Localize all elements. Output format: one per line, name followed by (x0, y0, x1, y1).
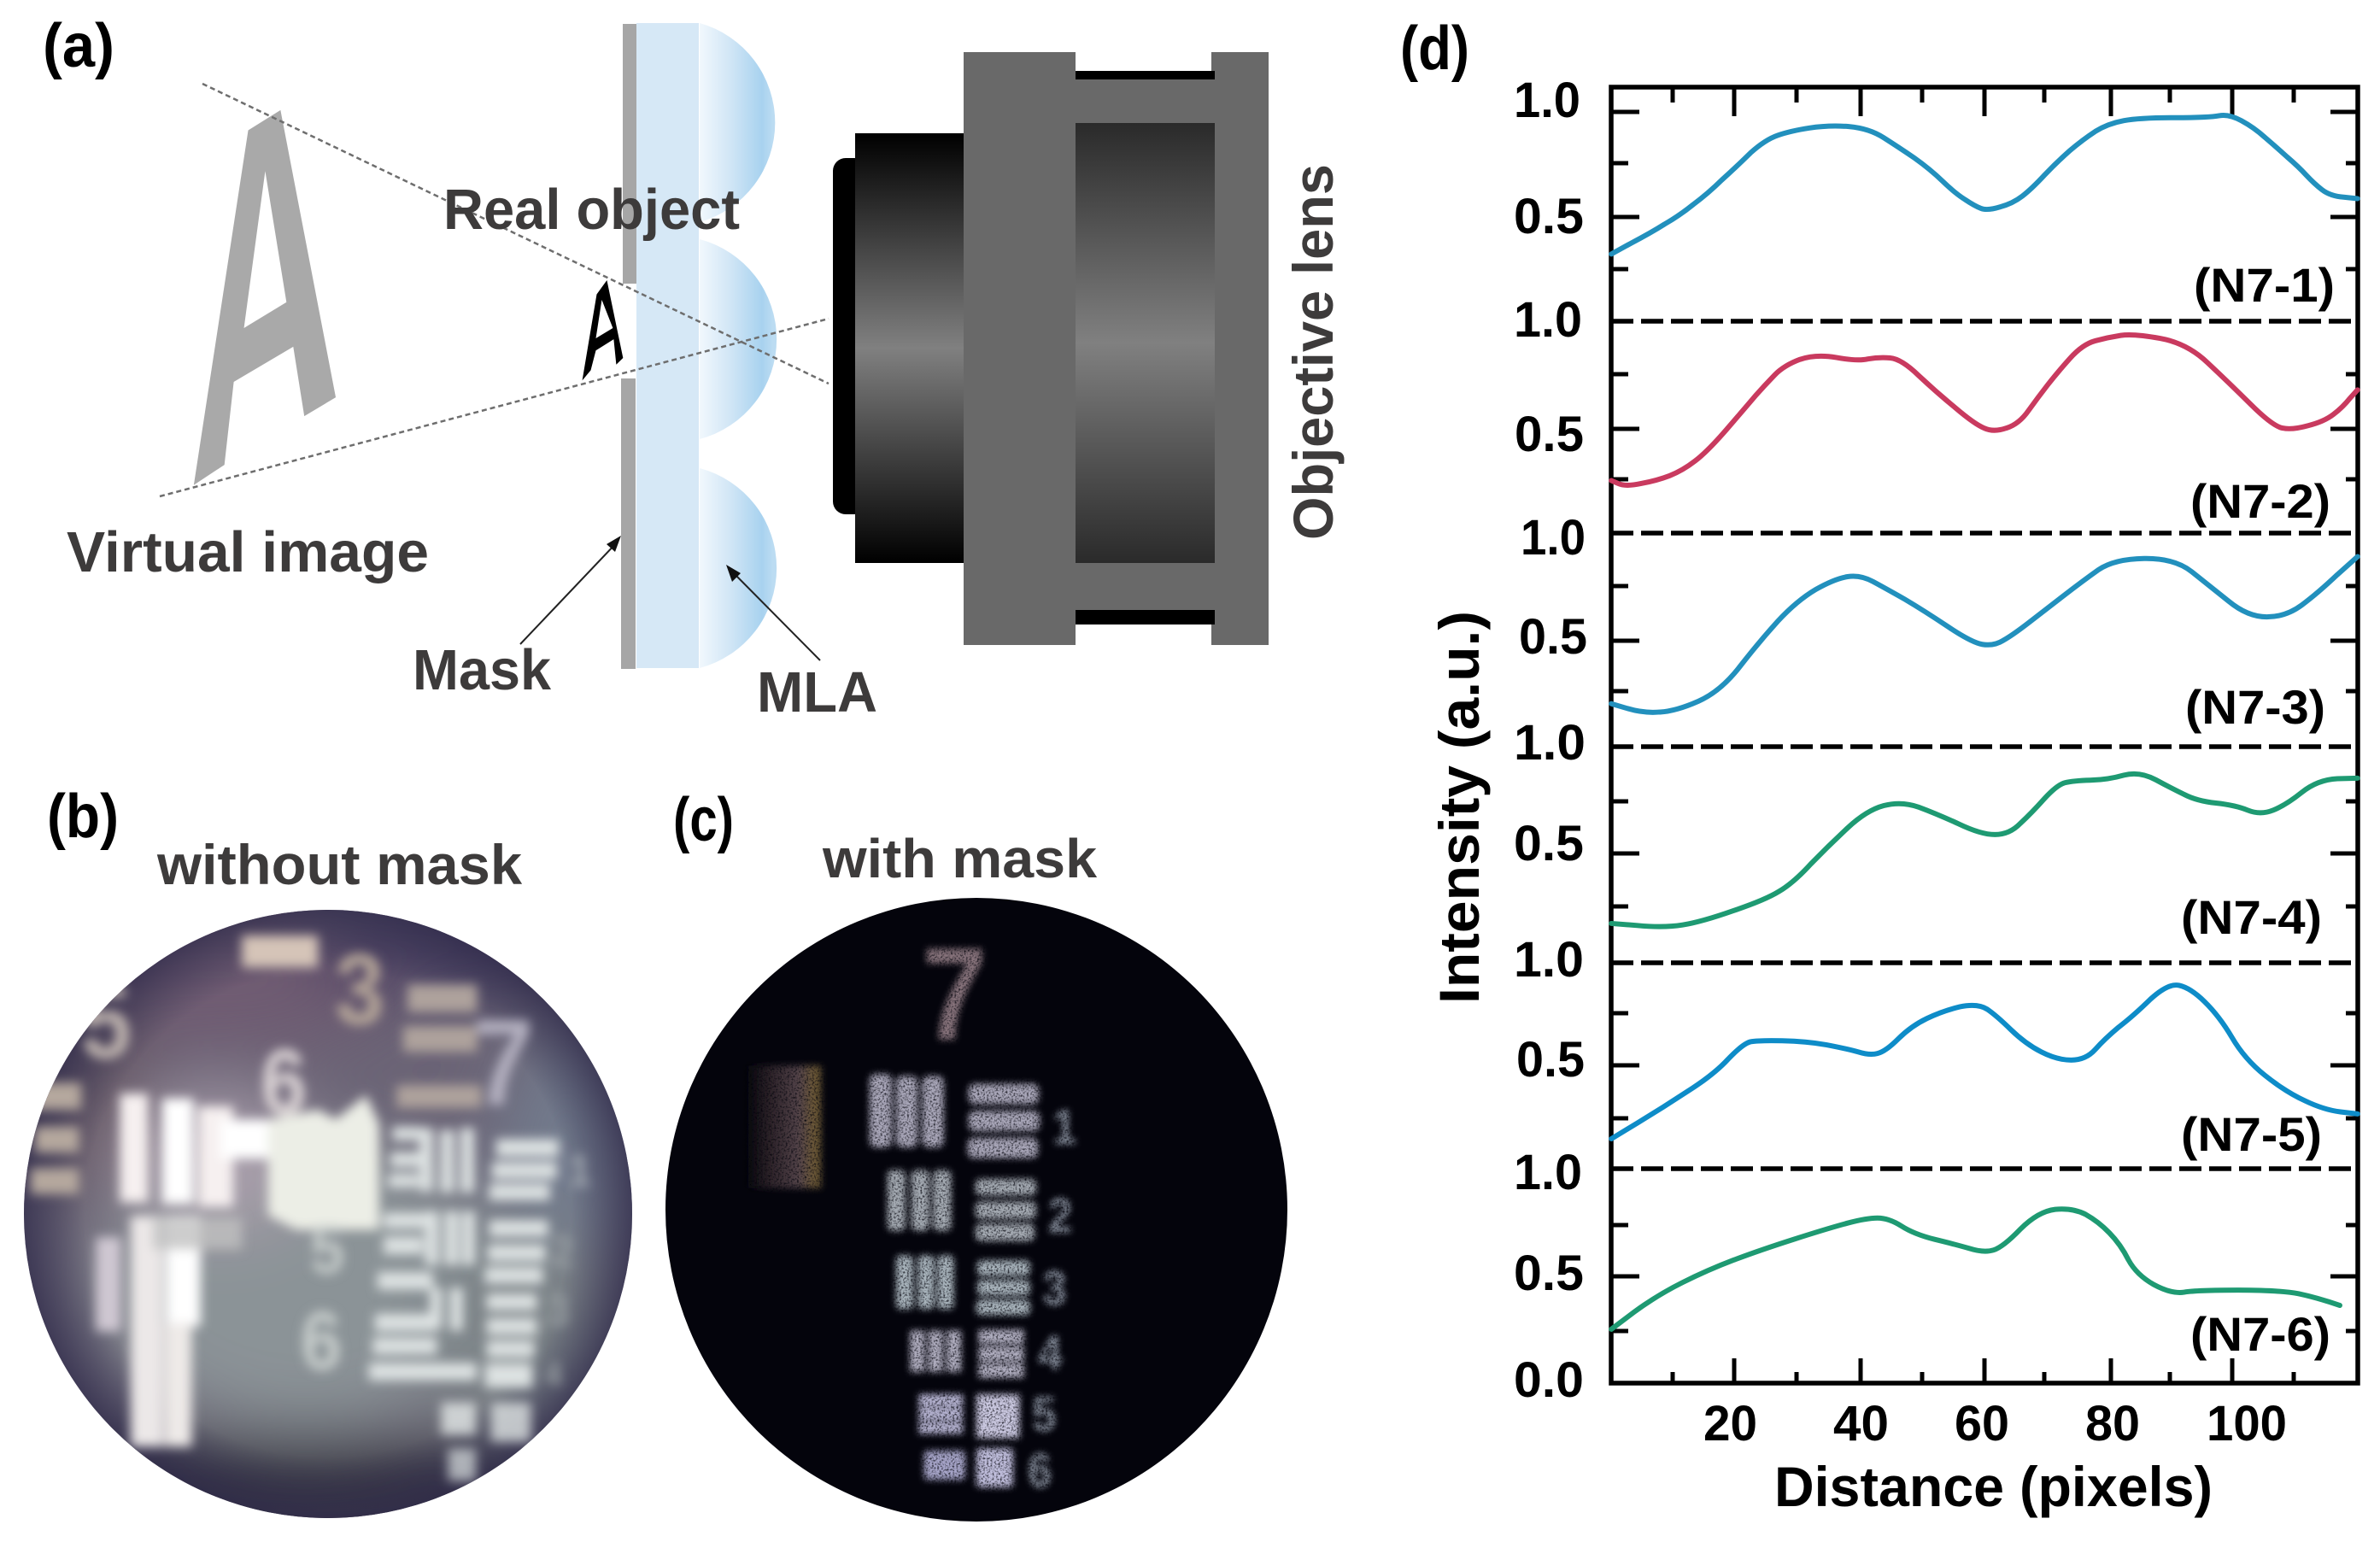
target row numbers: 4 (1038, 1325, 1062, 1381)
mask with aperture (621, 24, 636, 669)
series label N7-3: (N7-3) (2185, 680, 2325, 734)
target row numbers: 1 (1052, 1099, 1076, 1155)
micrograph b (17, 901, 641, 1544)
y axis title: Intensity (a.u.) (1427, 611, 1491, 1004)
label: real object: Real object (443, 178, 740, 242)
y tick labels: 0.5 (1516, 1032, 1585, 1088)
y tick labels (1514, 73, 1587, 1408)
group 5 bars (918, 1394, 1020, 1439)
virtual image letter A (194, 110, 336, 485)
y tick labels: 1.0 (1514, 1145, 1582, 1200)
y tick labels: 1.0 (1514, 715, 1586, 771)
x tick labels: 100 (2207, 1396, 2287, 1451)
panel label c: (c) (673, 786, 734, 854)
x tick labels: 80 (2085, 1396, 2140, 1451)
faded target digits: 2 (551, 1228, 573, 1276)
group 2 bars (888, 1170, 1036, 1241)
curve N7-1 (1611, 115, 2358, 254)
curve N7-4 (1611, 774, 2358, 927)
y tick labels: 0.0 (1514, 1352, 1584, 1408)
panel b: image without mask (17, 783, 641, 1544)
lower left bars (96, 1237, 121, 1331)
panel label b: (b) (47, 783, 119, 851)
series label N7-6: (N7-6) (2190, 1307, 2330, 1361)
x tick labels: 20 (1703, 1396, 1757, 1451)
dim block (747, 1065, 822, 1188)
panel a: optical schematic (43, 12, 1345, 724)
axis ticks (1611, 87, 2358, 1383)
caption: with mask: with mask (822, 828, 1097, 889)
panel c: image with mask (658, 786, 1294, 1529)
group 4 bars (910, 1329, 1024, 1378)
microlens array (700, 23, 777, 668)
objective dark strips (1076, 71, 1215, 624)
panel label a: (a) (43, 12, 114, 80)
faded target digits: 3 (335, 933, 384, 1046)
series label N7-4: (N7-4) (2181, 890, 2322, 944)
faded target digits: 5 (310, 1211, 344, 1288)
curve N7-5 (1611, 985, 2358, 1139)
y tick labels: 1.0 (1514, 73, 1580, 128)
objective end cap (833, 158, 867, 514)
arrow: mask (520, 536, 621, 644)
faded target digits: 1 (569, 1146, 590, 1196)
y tick labels: 0.5 (1519, 609, 1587, 665)
dashed separators (1611, 321, 2358, 1169)
curve N7-2 (1611, 335, 2358, 485)
target row numbers (1028, 1099, 1076, 1498)
label: virtual image: Virtual image (67, 520, 429, 584)
group 3 bars (896, 1255, 1030, 1315)
label: objective lens: Objective lens (1281, 164, 1345, 540)
target row numbers: 5 (1032, 1387, 1056, 1442)
label: mask: Mask (413, 638, 552, 702)
bright square (268, 1095, 379, 1230)
target row numbers: 3 (1042, 1261, 1067, 1316)
x tick labels: 40 (1833, 1396, 1889, 1451)
micrograph c (658, 893, 1294, 1529)
top right bars (396, 985, 482, 1108)
curve N7-3 (1611, 556, 2358, 712)
series label N7-5: (N7-5) (2181, 1107, 2322, 1161)
faded target digits: 7 (473, 994, 534, 1131)
objective inner barrel (1076, 123, 1215, 563)
panel label d: (d) (1400, 15, 1469, 83)
left horizontal bars (31, 1082, 81, 1194)
faded target digits: 3 (547, 1287, 569, 1335)
target row numbers: 2 (1048, 1188, 1072, 1243)
glass substrate (636, 23, 699, 668)
y tick labels: 0.5 (1514, 1246, 1584, 1301)
plot frame (1611, 87, 2358, 1383)
faded target digits: 6 (301, 1293, 342, 1387)
faded target digits: 4 (545, 1356, 562, 1394)
series label N7-1: (N7-1) (2194, 258, 2335, 312)
top bright block (242, 935, 318, 967)
group 6 bars (923, 1448, 1013, 1487)
y tick labels: 1.0 (1514, 932, 1584, 988)
y tick labels: 0.5 (1514, 816, 1584, 871)
real object letter A (583, 280, 623, 380)
curve N7-6 (1611, 1209, 2340, 1329)
x tick labels (1703, 1396, 2287, 1451)
objective housing (964, 52, 1269, 645)
y tick labels: 0.5 (1514, 189, 1584, 244)
series label N7-2: (N7-2) (2190, 474, 2330, 528)
ray lines (160, 84, 829, 496)
arrow: MLA (726, 565, 820, 660)
digit 7: 7 (922, 920, 987, 1069)
caption: without mask: without mask (156, 833, 522, 896)
bright vertical bars (120, 1094, 274, 1207)
y tick labels: 0.5 (1515, 407, 1584, 462)
group 1 bars (870, 1074, 1040, 1158)
label: MLA: MLA (757, 660, 877, 724)
y tick labels: 1.0 (1514, 292, 1582, 348)
faded target digits: 5 (80, 966, 132, 1081)
faded target digits (80, 933, 590, 1394)
target row numbers: 6 (1028, 1443, 1052, 1498)
right target groups (369, 1127, 559, 1481)
x axis title: Distance (pixels) (1774, 1455, 2213, 1518)
faded target digits: 6 (261, 1030, 307, 1135)
panel d: intensity profiles (1400, 15, 2358, 1518)
objective front tube (855, 133, 969, 563)
y tick labels: 1.0 (1521, 510, 1586, 566)
x tick labels: 60 (1955, 1396, 2009, 1451)
